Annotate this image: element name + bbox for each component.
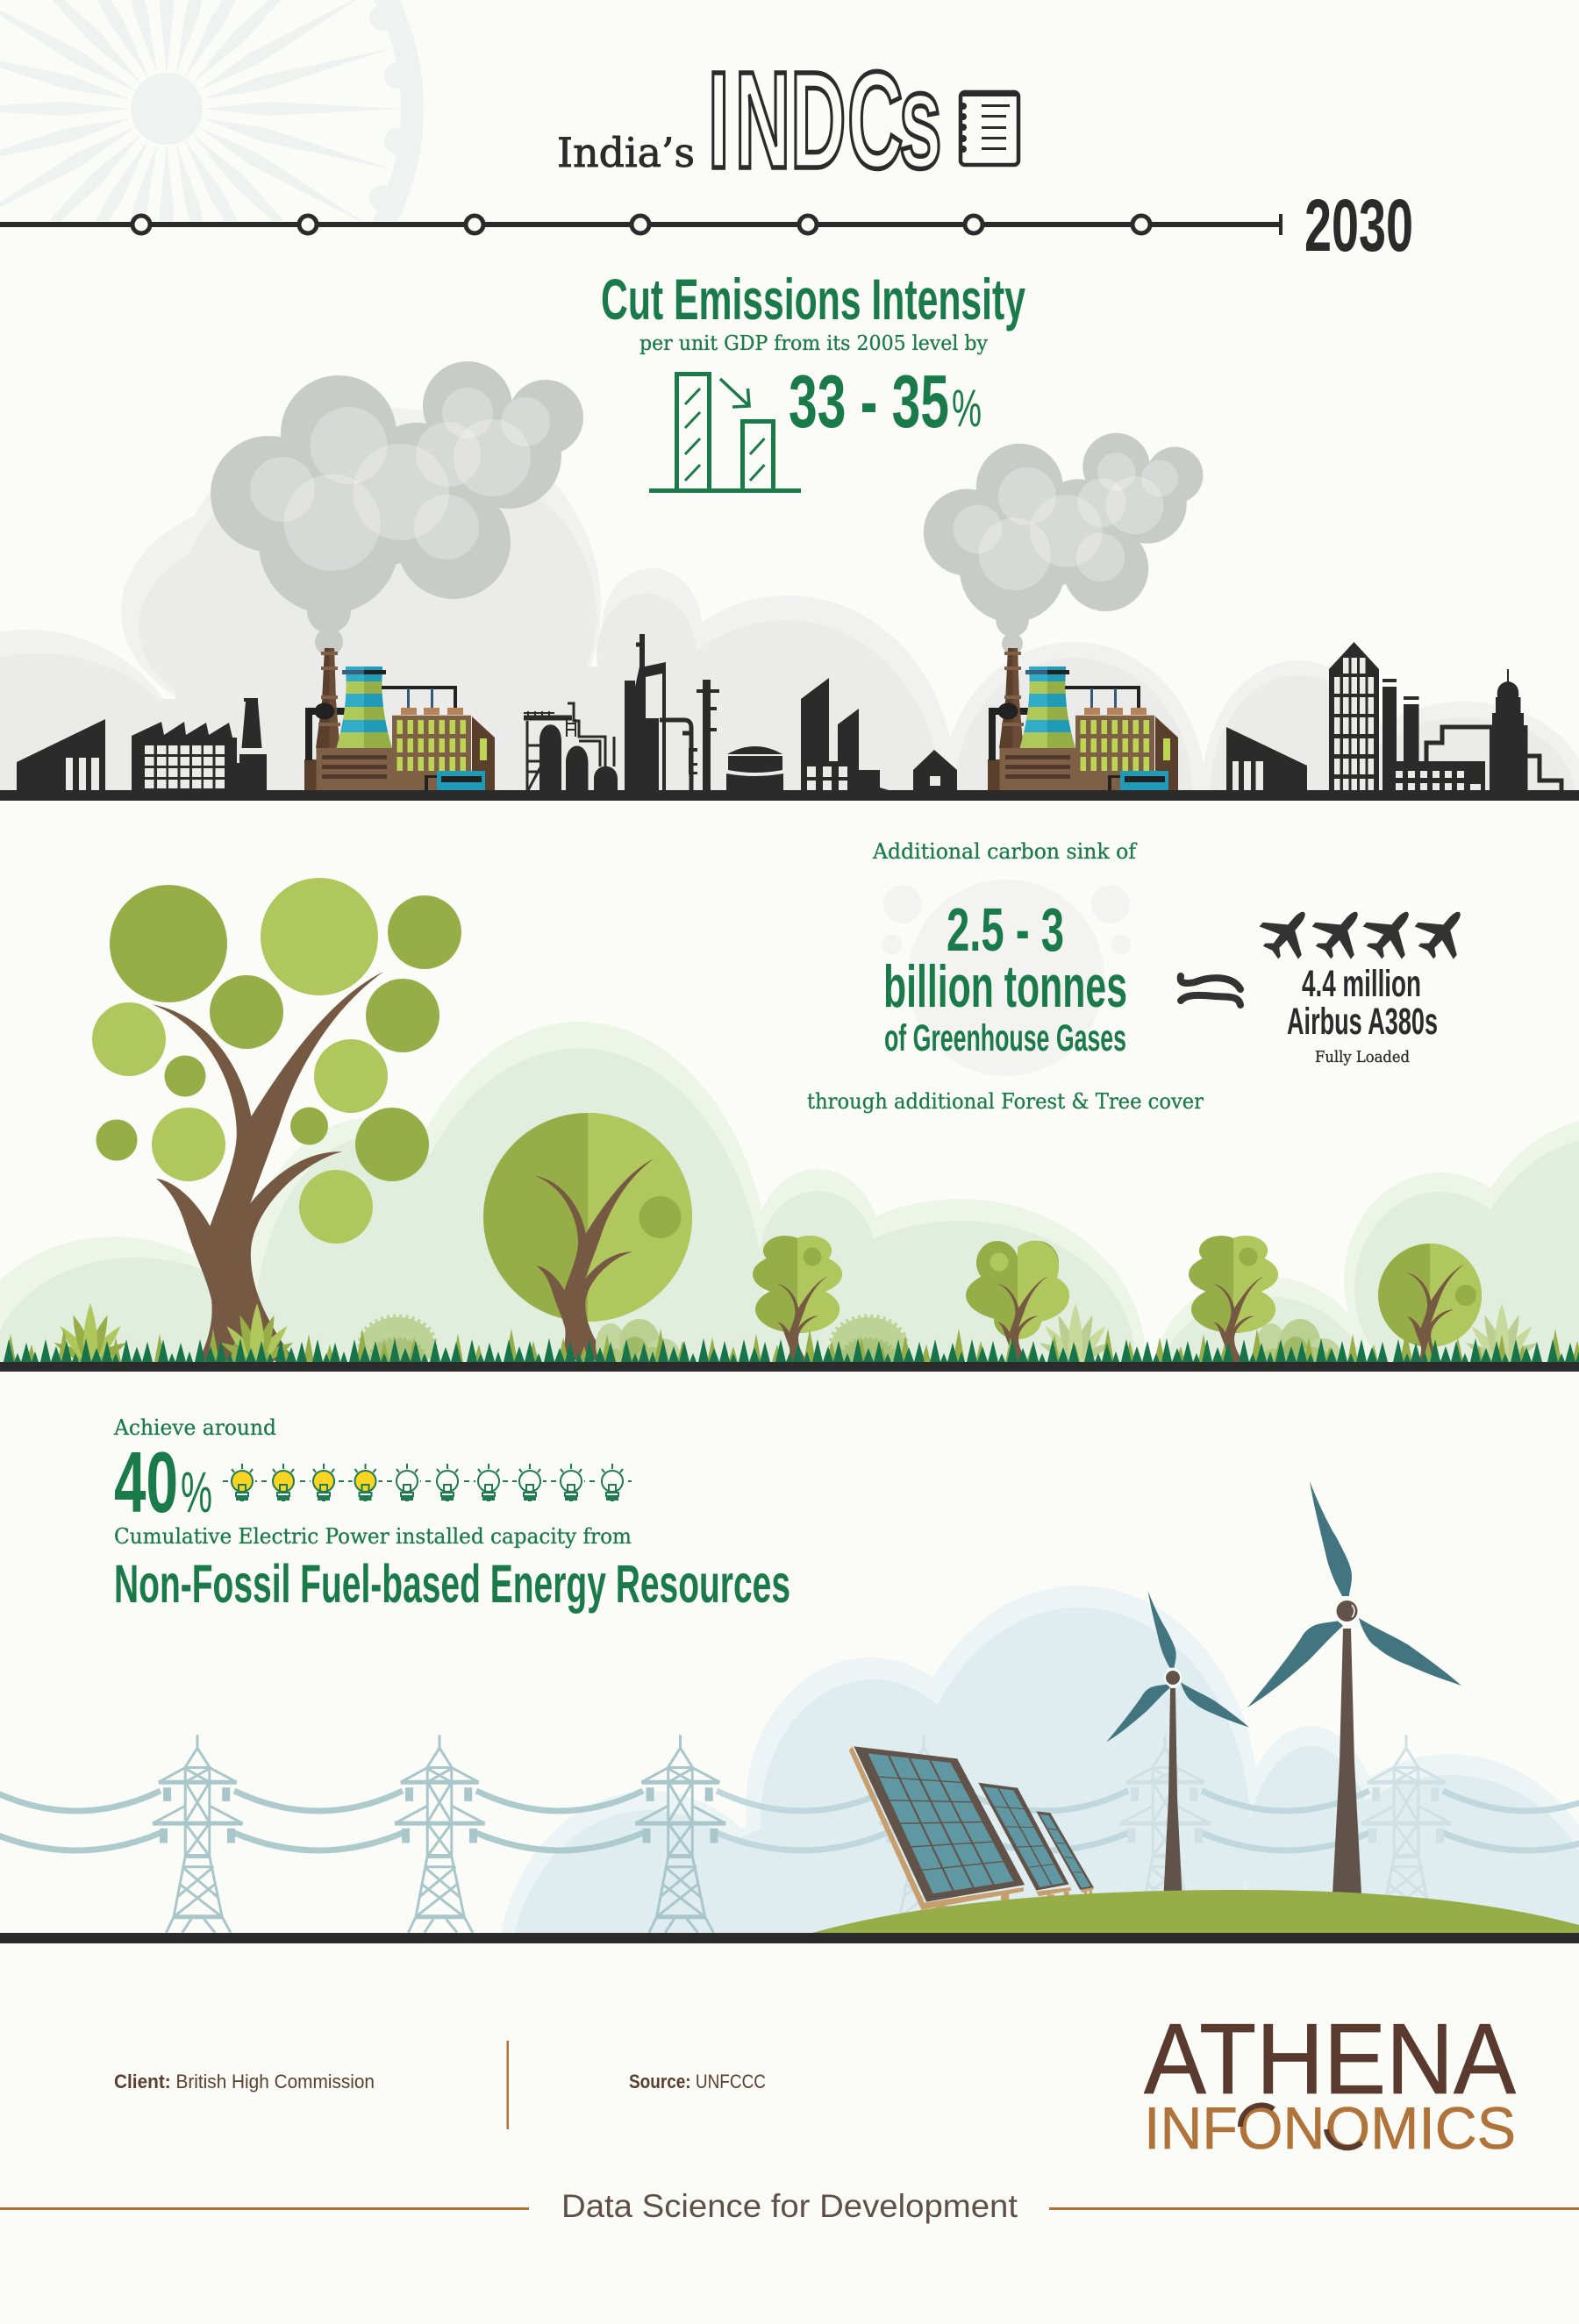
logo: athena infonomics: INFONOMICS (1144, 2095, 1516, 2162)
building: domed tower (1490, 669, 1561, 790)
icon: notebook (960, 92, 1018, 165)
icon row: ten light bulbs, four lit (223, 1464, 632, 1501)
wind turbine small (1106, 1591, 1249, 1894)
grass strip (0, 1327, 1579, 1362)
panel: cut emissions intensity (0, 277, 1579, 801)
building: shed left (17, 719, 105, 790)
text: cumulative electric power: Cumulative Electric Power installed capacity from (114, 1524, 632, 1549)
icon: falling bars (649, 374, 801, 491)
credit: source: Source: UNFCCC (629, 2071, 766, 2092)
faded pylons and wires (717, 1735, 1579, 1933)
wind turbine large (1247, 1481, 1461, 1894)
logo: athena infonomics (1144, 2004, 1516, 2162)
text: 4.4 million: 4.4 million (1302, 963, 1421, 1005)
text: per unit GDP: per unit GDP from its 2005 level by (639, 332, 988, 355)
statistic: 2.5 - 3: 2.5 - 3 (947, 895, 1064, 964)
background hills (0, 409, 1579, 790)
panel: carbon sink (0, 842, 1579, 1372)
smoke cloud left (211, 361, 583, 656)
refinery (524, 634, 719, 790)
heading block: achieve around: Achieve around (113, 1415, 276, 1440)
building: house (913, 750, 957, 790)
building: stepped factory (801, 678, 889, 790)
building: skyscraper (1329, 642, 1379, 790)
ground bar section 2 (0, 1362, 1579, 1372)
heading: cut emissions intensity: Cut Emissions Intensity (601, 267, 1025, 331)
smoke cloud right (924, 433, 1204, 654)
small tree 3 (1189, 1236, 1278, 1362)
panel: header (0, 0, 1411, 252)
statistic: 33 - 35%: 33 - 35 (789, 360, 949, 444)
building: sawtooth factory (132, 722, 237, 790)
building: shed right (1226, 727, 1307, 790)
power plant right (988, 648, 1178, 790)
text: airbus a380s: Airbus A380s (1287, 1001, 1438, 1043)
ground bar section 3 (0, 1933, 1579, 1943)
building: factory chimney (237, 698, 267, 790)
solar panels (849, 1746, 1094, 1913)
tank (726, 746, 783, 790)
statistic: 40%: % (181, 1459, 212, 1524)
credit: client: Client: British High Commission (114, 2071, 375, 2092)
text: fully loaded: Fully Loaded (1315, 1048, 1410, 1066)
solar panel large (849, 1746, 1025, 1913)
ground bar section 1 (0, 790, 1579, 801)
tagline: data science for development: Data Science for Development (561, 2188, 1018, 2224)
round tree (483, 1113, 692, 1360)
text: through additional forest: through additional Forest & Tree cover (807, 1089, 1204, 1114)
industrial skyline (17, 634, 1561, 790)
solar panel medium (978, 1783, 1071, 1901)
statistic: 40%: 40 (114, 1434, 178, 1530)
statistic: billion tonnes: billion tonnes (883, 953, 1127, 1020)
background hills green (0, 1022, 1579, 1362)
year label 2030: 2030 (1304, 184, 1413, 267)
title: India's: India’s (557, 129, 695, 176)
divider line (507, 2041, 509, 2129)
power plant left (304, 648, 495, 790)
transmission towers and wires (0, 1735, 725, 1933)
green hill (812, 1890, 1579, 1933)
title: INDCs outlined: INDCs (708, 43, 942, 196)
text: additional carbon sink: Additional carbon sink of (872, 839, 1138, 864)
text: of greenhouse gases: of Greenhouse Gases (884, 1017, 1126, 1059)
building: pillars and low factory (1383, 679, 1493, 790)
small tree 1 (753, 1236, 842, 1362)
grass tufts and bushes (54, 1303, 1539, 1362)
small tree 2 (966, 1241, 1069, 1362)
solar panel small (1036, 1811, 1094, 1896)
icon: approximately equal (1181, 976, 1240, 1005)
heading: non-fossil fuel-based energy resources: Non-Fossil Fuel-based Energy Resources (114, 1554, 790, 1614)
big tree (92, 878, 461, 1361)
icon: ashoka chakra watermark (0, 0, 424, 221)
faint bubble backdrop (882, 880, 1132, 1076)
icon: four airplanes (1251, 896, 1479, 969)
panel: footer (0, 2004, 1579, 2224)
small tree 4 (1378, 1244, 1482, 1362)
tagline rule right (1049, 2207, 1579, 2210)
statistic: 33 - 35%: % (952, 379, 982, 438)
timeline to 2030 (0, 214, 1282, 235)
logo: athena infonomics: ATHENA (1144, 2004, 1516, 2115)
tagline rule left (0, 2207, 529, 2210)
panel: non-fossil energy (0, 1418, 1579, 1943)
background hills blue (502, 1586, 1579, 1933)
